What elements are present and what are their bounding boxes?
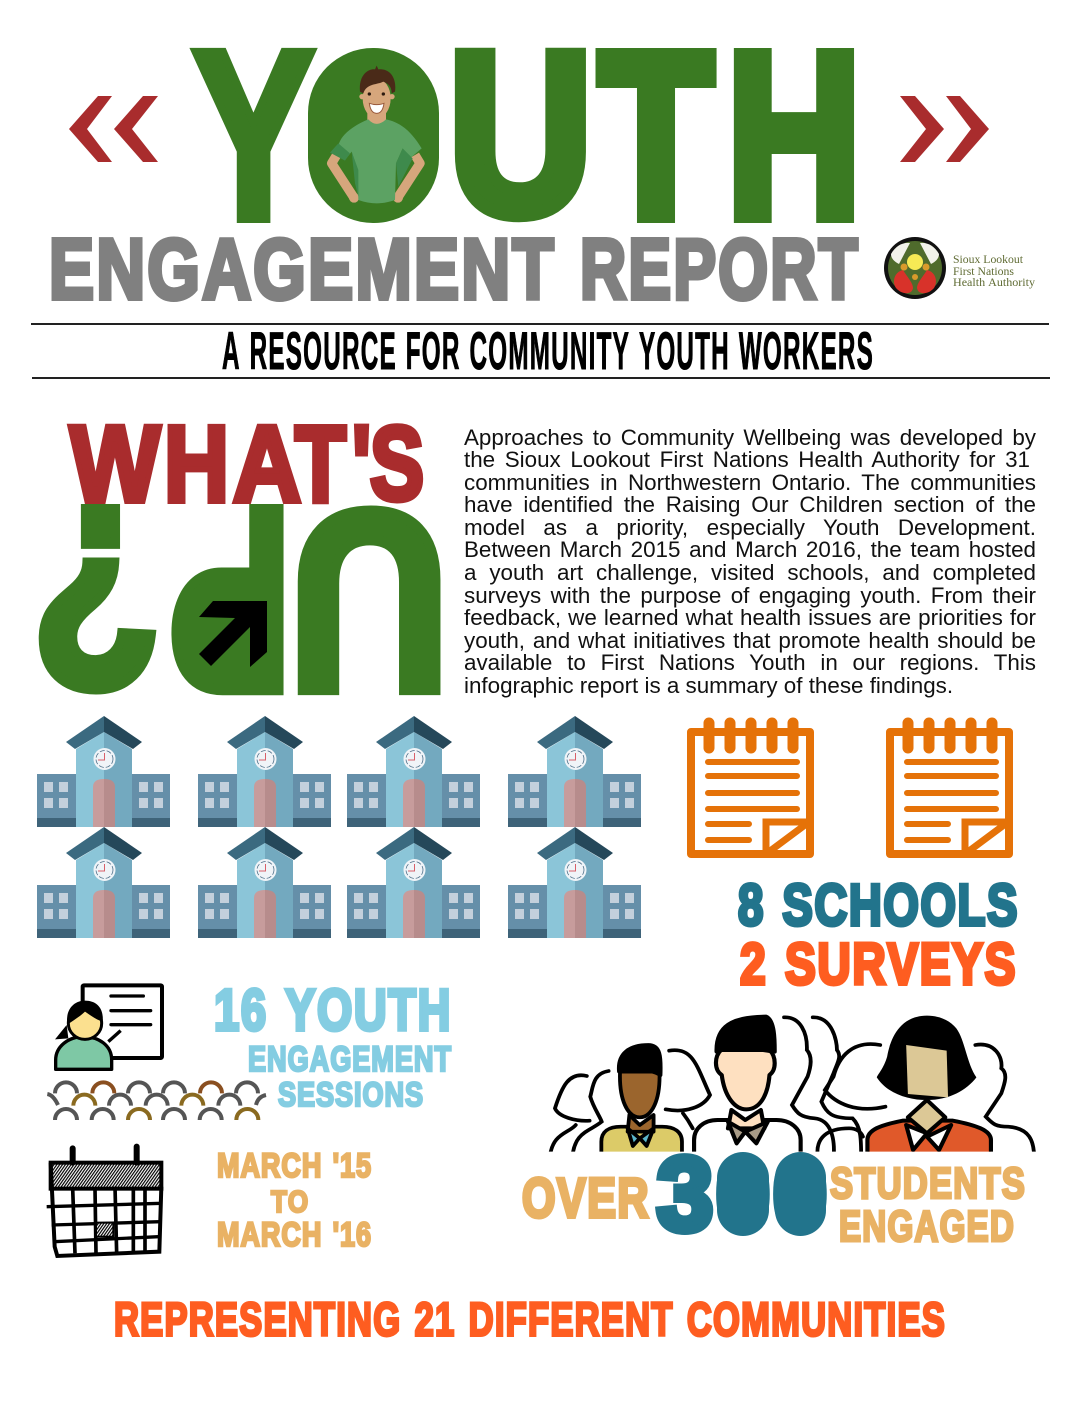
title: YOUTH: O [308, 7, 438, 264]
stat label: engaged: ENGAGED [839, 1202, 1015, 1251]
stat: 300: 3 [657, 1137, 713, 1253]
person: middle student [694, 1017, 801, 1160]
stat label: engagement: ENGAGEMENT [248, 1040, 452, 1079]
heading: UP? upside down: P [169, 454, 292, 746]
intro paragraph: Approaches to Community Wellbeing was developed by [464, 425, 1036, 450]
intro paragraph: a youth art challenge, visited schools, and completed [464, 560, 1036, 585]
stat: 16 youth: 16 YOUTH [214, 978, 452, 1043]
date range: March '16: MARCH '16 [217, 1216, 372, 1254]
icon: black up arrow [199, 601, 267, 667]
title: YOUTH: Y [193, 1, 314, 269]
stat: over: OVER [522, 1166, 650, 1229]
logo: Sioux Lookout First Nations Health Authority: First Nations [953, 266, 1015, 278]
intro paragraph [464, 425, 1036, 698]
heading: UP? upside down: U [289, 458, 449, 744]
heading: WHAT'S: T [295, 403, 346, 524]
icon: hand-drawn calendar [47, 1147, 162, 1256]
icon: teacher at board [55, 985, 162, 1069]
intro paragraph: Between March 2015 and March 2016, the team hosted [464, 537, 1036, 562]
intro paragraph: infographic report is a summary of these findings. [464, 673, 953, 698]
heading: UP? upside down: ? [31, 454, 161, 742]
intro paragraph: available to First Nations Youth in our regions. This [464, 650, 1036, 675]
left chevrons [69, 96, 158, 162]
heading: UP? upside down [31, 454, 449, 746]
icon: audience of arcs [47, 1082, 266, 1120]
icons: eight schools [37, 716, 641, 938]
stat: 300: 0 [716, 1137, 770, 1253]
logo: Sioux Lookout First Nations Health Authority: Health Authority [953, 277, 1035, 289]
stat label: sessions: SESSIONS [278, 1076, 424, 1114]
heading: WHAT'S: W [70, 403, 160, 524]
intro paragraph: communities in Northwestern Ontario. The communities [464, 470, 1036, 495]
intro paragraph: surveys with the purpose of engaging youth. From their [464, 583, 1036, 608]
title: YOUTH [193, 1, 861, 269]
stat: 2 surveys: 2 SURVEYS [740, 932, 1017, 997]
logo: Sioux Lookout First Nations Health Authority [884, 237, 1035, 299]
heading: WHAT'S: ' [352, 403, 371, 524]
heading: ENGAGEMENT REPORT: ENGAGEMENT [49, 222, 556, 318]
intro paragraph: feedback, we learned what health issues are priorities for [464, 605, 1036, 630]
title: YOUTH: U [449, 5, 592, 262]
intro paragraph: have identified the Raising Our Children section of the [464, 492, 1036, 517]
heading: WHAT'S: S [370, 406, 424, 522]
stat: 8 schools: 8 SCHOOLS [738, 873, 1019, 938]
heading: WHAT'S: A [233, 403, 301, 524]
heading: ENGAGEMENT REPORT: REPORT [580, 222, 860, 318]
intro paragraph: youth, and what initiatives that promote health should be [464, 628, 1036, 653]
date range: to: TO [271, 1184, 309, 1219]
icon: smiling young man in green shirt [330, 66, 422, 203]
heading: WHAT'S [70, 403, 424, 524]
stat: 300 [657, 1137, 827, 1253]
title: YOUTH: H [727, 4, 861, 266]
icon: group of students [550, 1016, 1034, 1160]
intro paragraph: model as a priority, especially Youth Development. [464, 515, 1036, 540]
person: left student [601, 1045, 682, 1160]
date range: March '15: MARCH '15 [217, 1147, 372, 1185]
stat: 300: 0 [773, 1137, 827, 1253]
title: YOUTH: T [599, 4, 713, 266]
logo: Sioux Lookout First Nations Health Authority: Sioux Lookout [953, 254, 1024, 266]
stat label: students: STUDENTS [830, 1159, 1026, 1208]
heading: WHAT'S: H [164, 403, 229, 524]
person: right student [867, 1016, 991, 1160]
intro paragraph: the Sioux Lookout First Nations Health Authority for 31 [464, 447, 1030, 472]
icons: two survey notepads [691, 723, 1009, 854]
right chevrons [900, 96, 989, 162]
